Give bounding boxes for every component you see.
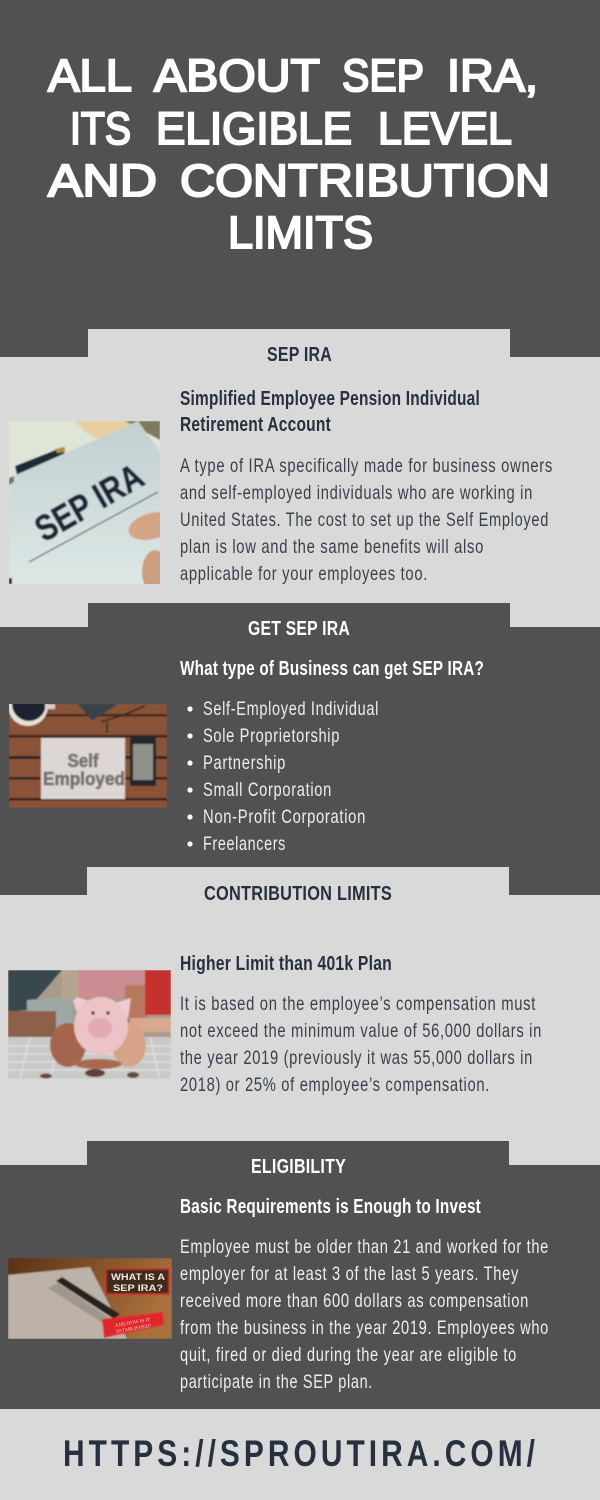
text block: SEP IRA description: plan is low and the same benefits will also <box>180 536 484 558</box>
text block: eligibility description: participate in the SEP plan. <box>180 1371 373 1393</box>
title: SEP <box>342 50 424 101</box>
text block: SEP IRA description <box>180 455 553 585</box>
subheading: Simplified Employee Pension: Simplified Employee Pension Individual <box>180 387 480 410</box>
list: business types: Non-Profit Corporation <box>203 806 366 828</box>
title: CONTRIBUTION <box>180 155 550 206</box>
image: What is a SEP IRA: SEP IRA? <box>113 1283 163 1294</box>
title: LEVEL <box>378 103 512 154</box>
list: business types <box>187 698 379 855</box>
list: business types: Partnership <box>203 752 286 774</box>
list: business types: Freelancers <box>203 833 286 855</box>
title <box>48 50 550 258</box>
list: business types: Sole Proprietorship <box>203 725 340 747</box>
title: ALL <box>48 50 132 101</box>
panel: CONTRIBUTION LIMITS <box>0 867 600 1165</box>
subheading: Higher Limit: Higher Limit than 401k Plan <box>180 952 392 975</box>
panel: website footer <box>0 1409 600 1500</box>
heading: ELIGIBILITY: ELIGIBILITY <box>251 1155 346 1178</box>
subheading: What type of Business: What type of Business can get SEP IRA? <box>180 657 484 680</box>
text block: contribution description <box>180 993 542 1096</box>
subheading: Simplified Employee Pension: Retirement Account <box>180 413 331 436</box>
text block: SEP IRA description: applicable for your employees too. <box>180 563 428 585</box>
image: What is a SEP IRA <box>8 1258 172 1339</box>
list: business types: Self-Employed Individual <box>203 698 379 720</box>
image: SEP IRA document <box>9 421 160 584</box>
image: What is a SEP IRA: WHAT IS A <box>111 1272 165 1283</box>
title: ITS <box>70 103 131 154</box>
heading: GET SEP IRA: GET SEP IRA <box>248 617 350 640</box>
text block: eligibility description <box>180 1236 549 1393</box>
image: Self Employed notebook <box>9 704 167 808</box>
panel: ELIGIBILITY <box>8 1141 548 1392</box>
title: IRA, <box>447 50 538 101</box>
title: ELIGIBLE <box>156 103 352 154</box>
panel: SEP IRA <box>0 329 600 627</box>
image: Self Employed notebook: Employed <box>43 769 125 789</box>
image: SEP IRA document: SEP IRA <box>28 455 150 550</box>
title: AND <box>48 155 157 206</box>
title: LIMITS <box>228 207 373 258</box>
panel: GET SEP IRA <box>9 603 510 850</box>
heading: SEP IRA: SEP IRA <box>267 343 332 366</box>
image: Self Employed notebook: Self <box>68 751 99 771</box>
title: ABOUT <box>154 50 320 101</box>
list: business types: Small Corporation <box>203 779 332 801</box>
image: piggy bank in hands <box>8 970 171 1079</box>
image: What is a SEP IRA: ESTABLISHED? <box>116 1324 152 1335</box>
image: What is a SEP IRA: AND HOW IS IT <box>115 1318 151 1329</box>
subheading: Simplified Employee Pension <box>180 387 480 436</box>
text block: contribution description: 2018) or 25% of employee’s compensation. <box>180 1074 490 1096</box>
subheading: Basic Requirements: Basic Requirements is Enough to Invest <box>180 1195 481 1218</box>
heading: CONTRIBUTION LIMITS: CONTRIBUTION LIMITS <box>204 882 392 905</box>
